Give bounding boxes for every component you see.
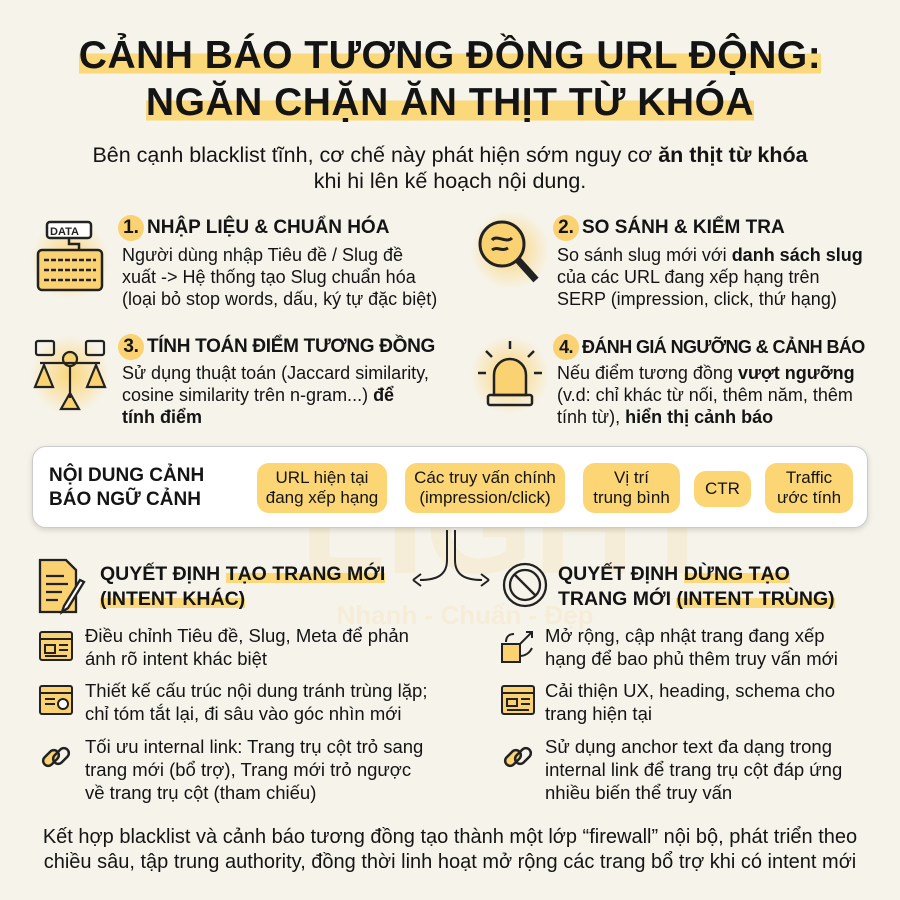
heading 1: NHẬP LIỆU & CHUẨN HÓA — [147, 217, 389, 238]
text 3 — [122, 363, 429, 427]
pill: CTR: CTR — [705, 479, 740, 498]
watermark: Nhanh - Chuẩn - Đẹp — [336, 600, 594, 630]
icon: alarm — [473, 338, 546, 412]
heading 1: 1. — [123, 217, 139, 238]
list: stop actions — [501, 625, 842, 803]
pill: URL: URL hiện tại — [276, 468, 368, 487]
text: Thiết kế cấu trúc nội dung tránh trùng lặp; — [85, 680, 427, 701]
text: ánh rõ intent khác biệt — [85, 648, 267, 669]
pill: queries: (impression/click) — [419, 488, 551, 507]
pill: queries: Các truy vấn chính — [414, 468, 556, 487]
pill: traffic — [765, 463, 853, 513]
icon: expand box — [501, 631, 533, 663]
text: Điều chỉnh Tiêu đề, Slug, Meta để phản — [85, 625, 409, 646]
title: NGĂN CHẶN ĂN THỊT TỪ KHÓA — [146, 81, 754, 124]
icon: magnifier — [474, 213, 546, 286]
context label: BÁO NGỮ CẢNH — [49, 489, 201, 510]
icon: link — [504, 746, 532, 768]
subtitle — [92, 143, 808, 193]
title: CẢNH BÁO TƯƠNG ĐỒNG URL ĐỘNG: — [79, 34, 821, 77]
arrows: split — [412, 530, 490, 587]
subtitle: Bên cạnh blacklist tĩnh, cơ chế này phát hiện sớm nguy cơ ăn thịt từ khóa — [92, 143, 808, 167]
heading 3: 3. — [123, 336, 139, 357]
subtitle: khi hi lên kế hoạch nội dung. — [314, 169, 586, 193]
pill: URL — [257, 463, 387, 513]
footer summary: Kết hợp blacklist và cảnh báo tương đồng tạo thành một lớp “firewall” nội bộ, phát triển theo — [43, 826, 857, 848]
text 2: của các URL đang xếp hạng trên — [557, 267, 820, 287]
text 1: Người dùng nhập Tiêu đề / Slug đề — [122, 245, 403, 265]
text 2 — [557, 245, 863, 309]
heading 4: 4. — [559, 337, 573, 357]
text — [85, 680, 427, 724]
heading 4: ĐÁNH GIÁ NGƯỠNG & CẢNH BÁO — [582, 337, 865, 357]
text — [85, 736, 423, 803]
icon: keyboard data: DATA — [50, 226, 79, 238]
text: Tối ưu internal link: Trang trụ cột trỏ sang — [85, 736, 423, 757]
icon: scales — [33, 338, 107, 412]
heading: QUYẾT ĐỊNH TẠO TRANG MỚI — [100, 563, 385, 585]
icon: no sign — [502, 562, 548, 608]
text 1: (loại bỏ stop words, dấu, ký tự đặc biệt) — [122, 289, 437, 309]
text: trang mới (bổ trợ), Trang mới trỏ ngược — [85, 759, 411, 780]
pill: position: trung bình — [593, 488, 670, 507]
heading: (INTENT KHÁC) — [100, 588, 245, 610]
watermark: LIGHT — [300, 446, 720, 603]
step 3 — [33, 334, 435, 427]
text 3: cosine similarity trên n-gram...) để — [122, 385, 394, 405]
text 4: (v.d: chỉ khác từ nối, thêm năm, thêm — [557, 385, 853, 405]
pill: traffic: ước tính — [777, 488, 841, 507]
text — [85, 625, 409, 669]
text: về trang trụ cột (tham chiếu) — [85, 782, 316, 803]
title — [79, 33, 821, 124]
heading 4 — [553, 334, 865, 360]
pill: CTR — [694, 471, 751, 507]
text: nhiều biến thể truy vấn — [545, 782, 732, 803]
pill: URL: đang xếp hạng — [266, 488, 378, 507]
step 2 — [474, 213, 863, 309]
heading — [100, 562, 385, 610]
icon: keyboard data — [34, 220, 106, 296]
text: trang hiện tại — [545, 703, 652, 724]
text: Mở rộng, cập nhật trang đang xếp — [545, 625, 825, 646]
pill: position — [583, 463, 680, 513]
icon: window — [501, 685, 535, 715]
decision: stop — [502, 562, 835, 610]
text 4 — [557, 363, 855, 427]
text: Sử dụng anchor text đa dạng trong — [545, 736, 832, 757]
text 4: Nếu điểm tương đồng vượt ngưỡng — [557, 363, 855, 383]
text 1: xuất -> Hệ thống tạo Slug chuẩn hóa — [122, 267, 416, 287]
heading: TRANG MỚI (INTENT TRÙNG) — [558, 588, 835, 610]
text — [545, 625, 838, 669]
pill: queries — [405, 463, 565, 513]
icon: layout search — [39, 685, 73, 715]
text 2: So sánh slug mới với danh sách slug — [557, 245, 863, 265]
heading — [558, 562, 835, 610]
text — [545, 680, 835, 724]
icon: page — [39, 631, 73, 661]
icon: link — [42, 746, 70, 768]
step 4 — [473, 334, 865, 427]
pill: traffic: Traffic — [786, 468, 832, 487]
text 2: SERP (impression, click, thứ hạng) — [557, 289, 837, 309]
heading 2: SO SÁNH & KIỂM TRA — [582, 217, 785, 238]
text: hạng để bao phủ thêm truy vấn mới — [545, 648, 838, 669]
text 3: tính điểm — [122, 407, 202, 427]
step 1 — [34, 215, 437, 309]
context label — [49, 463, 204, 510]
context label: NỘI DUNG CẢNH — [49, 465, 204, 486]
heading: QUYẾT ĐỊNH DỪNG TẠO — [558, 563, 790, 585]
decision: create new page — [38, 558, 385, 615]
text: Cải thiện UX, heading, schema cho — [545, 680, 835, 701]
footer summary: chiều sâu, tập trung authority, đồng thời linh hoạt mở rộng các trang bổ trợ khi có intent mới — [44, 851, 856, 873]
panel: context content — [32, 446, 868, 528]
icon: document pen — [38, 558, 86, 615]
text — [545, 735, 842, 804]
text: internal link để trang trụ cột đáp ứng — [545, 759, 842, 780]
list: new page actions — [39, 625, 427, 803]
footer summary — [0, 825, 900, 875]
heading 3: TÍNH TOÁN ĐIỂM TƯƠNG ĐỒNG — [147, 336, 435, 357]
pill: position: Vị trí — [614, 468, 649, 487]
text 1 — [122, 245, 437, 309]
text 3: Sử dụng thuật toán (Jaccard similarity, — [122, 363, 429, 383]
heading 2: 2. — [558, 217, 574, 238]
text: chỉ tóm tắt lại, đi sâu vào góc nhìn mới — [85, 703, 402, 724]
text 4: tính từ), hiển thị cảnh báo — [557, 407, 773, 427]
